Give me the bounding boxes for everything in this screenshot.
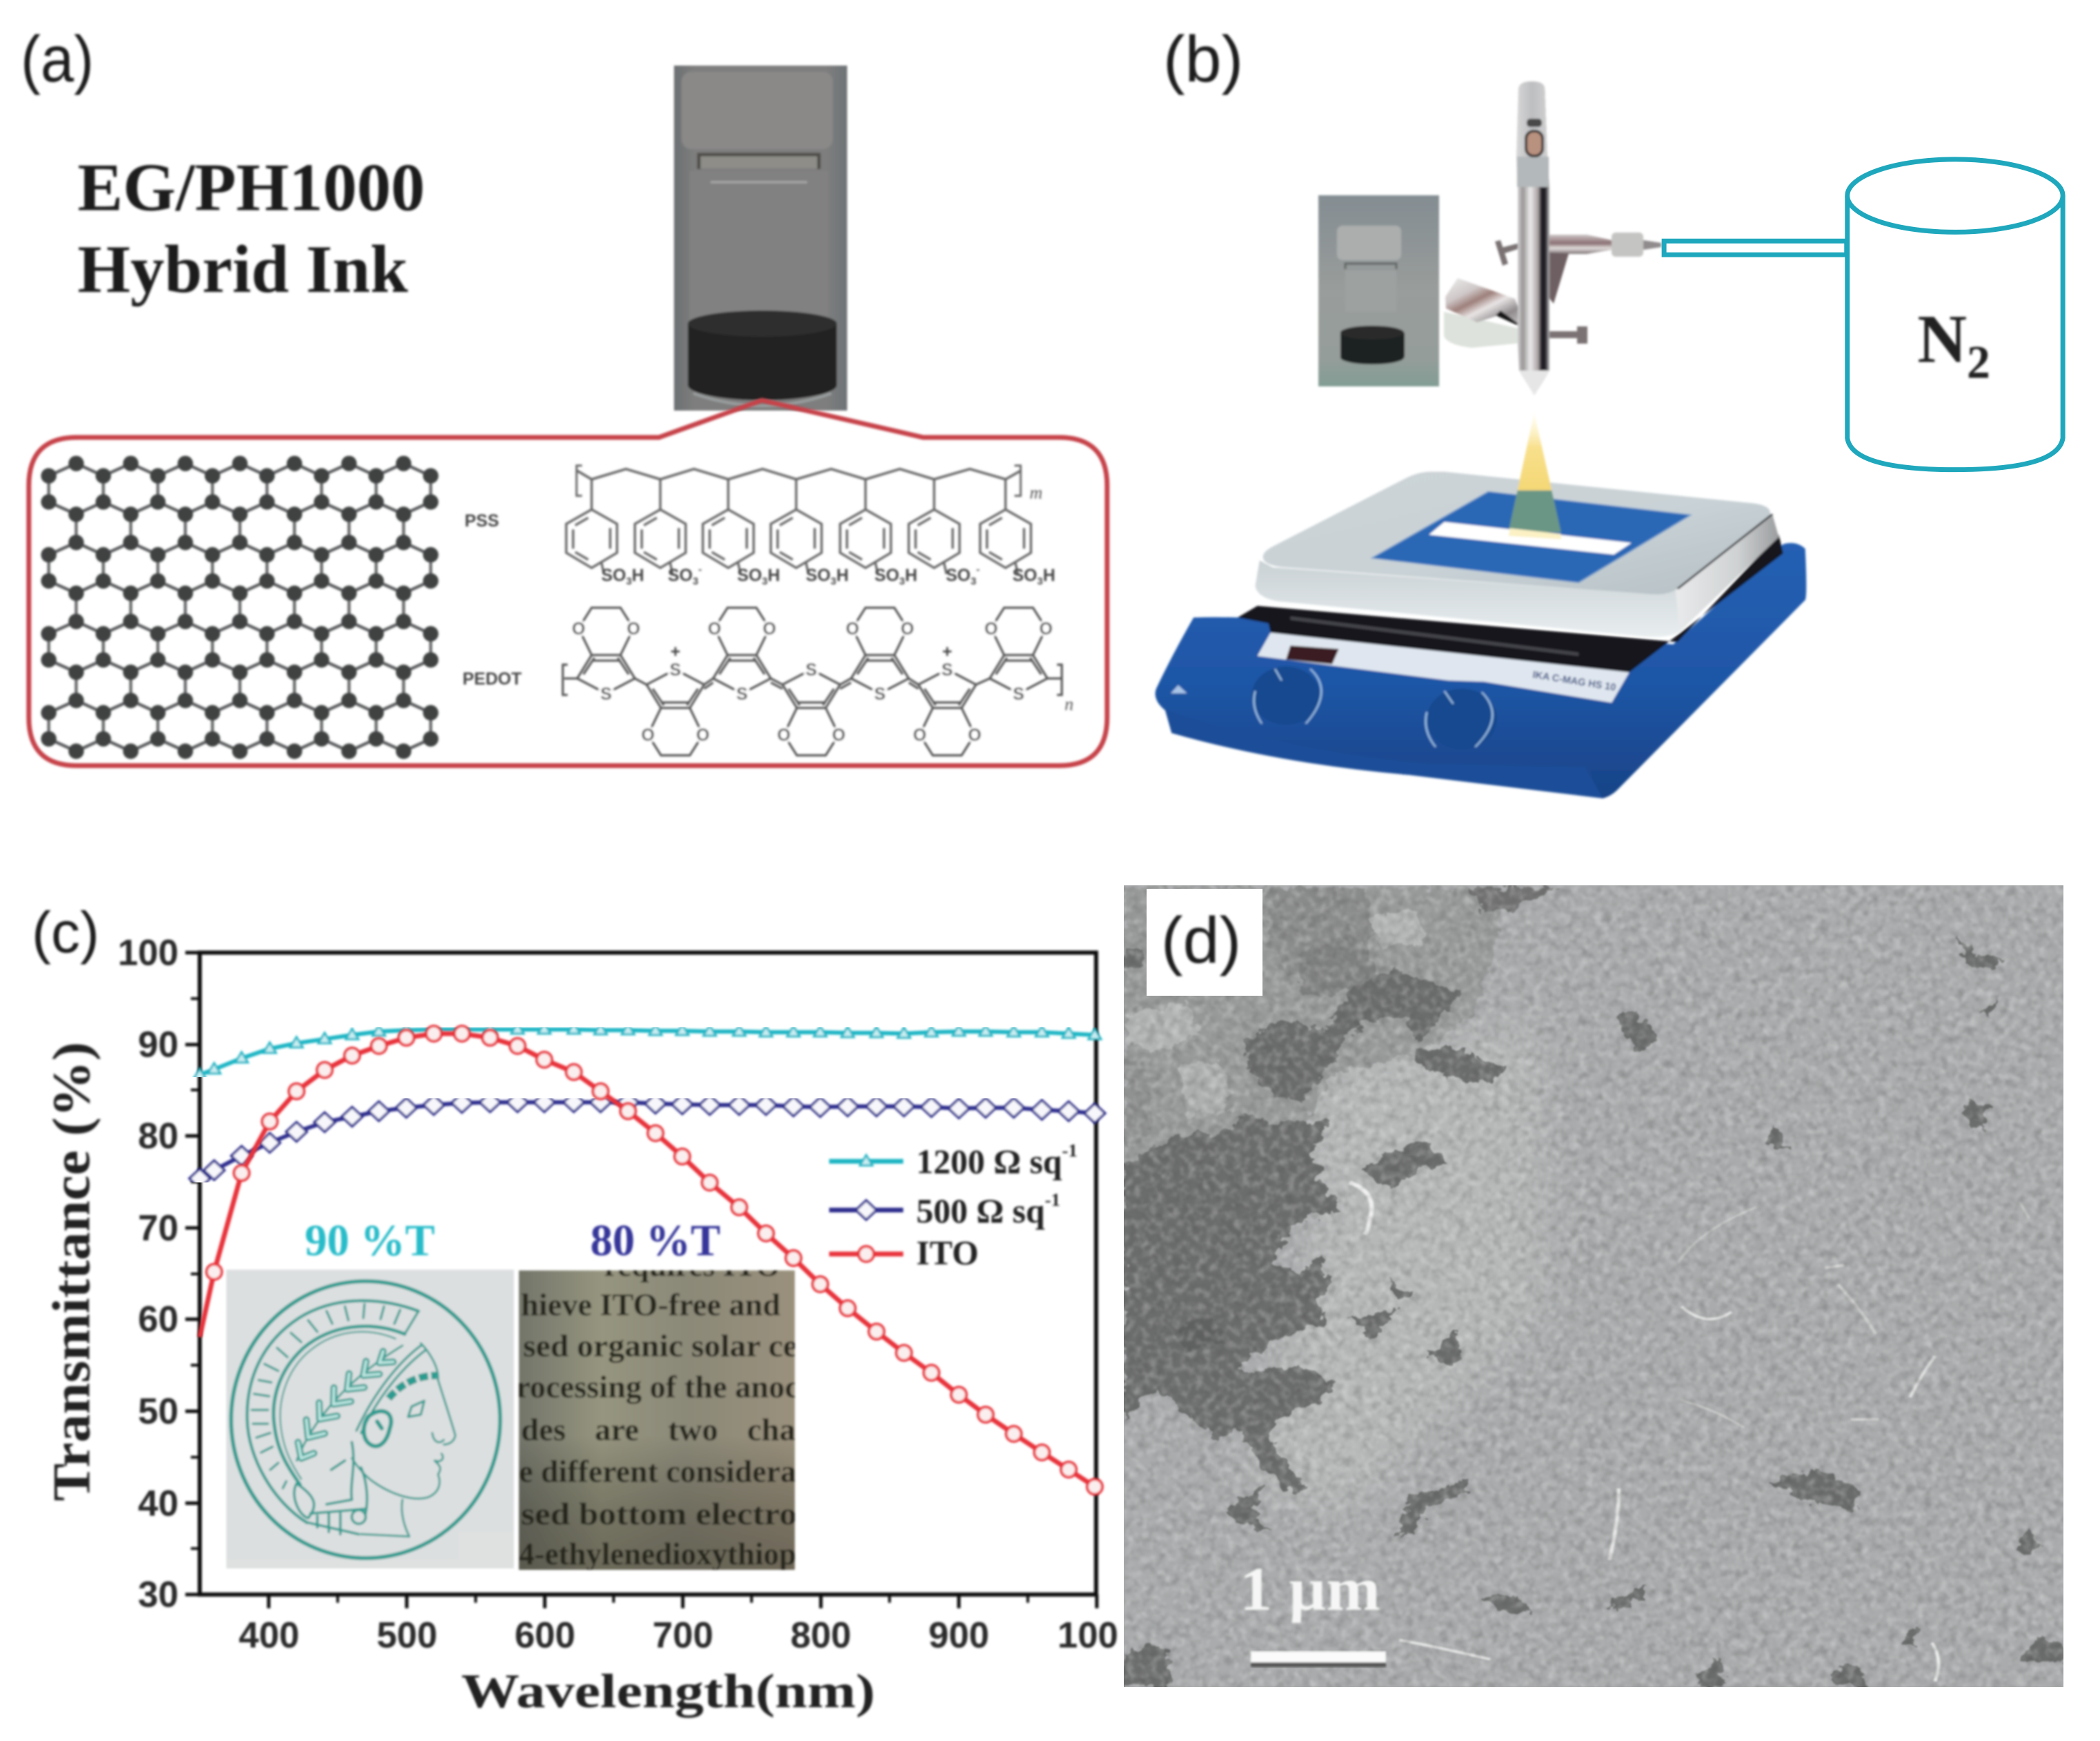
PSS chemical structure: H [1043,566,1056,585]
airbrush cup wedge [1496,311,1526,329]
PEDOT chemical structure: O [984,619,998,638]
PSS chemical structure: SO [668,564,706,587]
PEDOT chemical structure: O [572,619,585,638]
legend: 500 ohm: -1 [1045,1190,1060,1210]
inset label: 80 %T: 80 %T [591,1215,720,1265]
airbrush barrel [1516,81,1549,395]
digital display [1286,645,1339,665]
PSS chemical structure: SO [946,564,984,587]
spray cone above substrate [1518,413,1552,491]
hot plate [1156,413,1806,798]
PEDOT chemical structure: S [942,660,953,680]
PSS chemical structure [566,466,1056,587]
airbrush air valve and nut [1548,233,1661,257]
knob right [1426,689,1497,749]
legend: 1200 ohm: -1 [1062,1140,1078,1161]
heading: EG/PH1000 Hybrid Ink: Hybrid Ink [77,232,408,307]
PEDOT chemical structure: O [846,619,859,638]
brighter film near the exposed edge [1258,1035,1538,1504]
icon: airbrush [1444,81,1661,395]
panel label b: (b) [1163,23,1243,96]
heading: EG/PH1000 Hybrid Ink: EG/PH1000 [77,150,425,226]
inset photo: text through 80 %T film: requires ITO [604,1248,780,1283]
photo: small ink vial [1318,195,1439,386]
legend [829,1140,1078,1272]
x axis tick labels: 900 [929,1615,989,1655]
PEDOT chemical structure: S [670,660,681,680]
spray on substrate [1508,491,1561,533]
panel label c: (c) [32,900,99,965]
chart frame and axes [186,952,1097,1609]
y axis tick labels: 50 [138,1391,179,1432]
callout: red rounded box with pointer [29,400,1107,766]
N2 cylinder [1848,159,2063,470]
panel: d, SEM micrograph [1124,885,2063,1687]
spray on strip [1509,528,1561,540]
PEDOT chemical structure: S [736,685,748,704]
PSS chemical structure: SO [737,566,780,587]
series: 1200 ohm per square [200,1030,1095,1075]
PEDOT chemical structure: S [806,660,817,680]
x axis tick labels: 500 [377,1615,437,1655]
PEDOT chemical structure: S [600,685,612,704]
warning triangle [1171,685,1187,694]
PSS chemical structure: H [905,566,918,585]
inset label: 90 %T: 90 %T [305,1215,435,1265]
PEDOT chemical structure [563,608,1073,756]
PEDOT chemical structure: O [913,726,927,745]
graphene lattice [49,464,430,751]
y axis title: Transmittance (%) [41,1042,101,1501]
panel: c, transmittance chart [32,900,1118,1718]
PSS chemical structure: - [698,564,702,576]
PEDOT chemical structure: O [708,619,721,638]
PSS chemical structure: 3 [762,576,768,587]
dark exposed regions [1124,934,2063,1687]
airbrush lower cup base [1444,312,1525,348]
PSS chemical structure: SO [875,566,918,587]
PEDOT chemical structure: S [874,685,886,704]
x axis tick labels: 600 [515,1615,575,1655]
inset photo: text through 80 %T film: sed organic solar ce [523,1328,798,1363]
white strip [1429,522,1632,555]
PSS chemical structure: m [1029,482,1042,502]
PEDOT chemical structure: + [671,642,680,661]
legend: 500 ohm: 500 Ω sq [916,1192,1045,1230]
label: PSS: PSS [465,511,499,531]
white label box [1147,889,1262,996]
photo: ink vial [674,66,847,411]
PEDOT chemical structure: + [942,642,952,661]
SEM image [1124,885,2063,1687]
x axis tick labels: 400 [239,1615,299,1655]
PSS chemical structure: H [632,566,644,585]
airbrush trigger screws [1495,240,1587,344]
legend: 500 ohm [829,1190,1060,1230]
mottled upper left film [1124,887,2063,1687]
PSS chemical structure: H [768,566,780,585]
PEDOT chemical structure: O [968,726,981,745]
y axis tick labels: 70 [138,1208,179,1248]
PEDOT chemical structure: O [901,619,914,638]
inset photo: text through 80 %T film: des are two cha [521,1412,795,1447]
knob left [1251,667,1321,725]
y axis tick labels: 80 [138,1116,179,1157]
label: N2: 2 [1967,336,1990,388]
inset photo: text through 80 %T film: e different considera [519,1454,796,1489]
PEDOT chemical structure: O [832,726,845,745]
panel: b, spray coating setup [1156,23,2063,798]
y axis tick labels: 40 [138,1483,179,1524]
y axis tick labels: 90 [138,1025,179,1065]
hot plate top [1263,472,1770,594]
control strip [1258,633,1630,702]
PSS chemical structure: 3 [626,576,632,587]
inset photo: text through 80 %T film [516,1248,799,1571]
inset photo: text through 80 %T film: 4-ethylenedioxythiop [519,1536,796,1571]
Max Planck logo [231,1281,500,1558]
PEDOT chemical structure: O [696,726,709,745]
PEDOT chemical structure: S [1013,685,1024,704]
PEDOT chemical structure: n [1064,694,1073,714]
hot plate front lip [1165,709,1603,798]
bright fibres [1349,1182,2029,1682]
inset photo: text through 80 %T film: rocessing of the anoc [516,1369,799,1404]
PSS chemical structure: SO [806,566,849,587]
x axis tick labels: 100 [1058,1615,1118,1655]
PSS chemical structure: SO [1012,566,1056,587]
PEDOT chemical structure: O [627,619,640,638]
legend: ITO: ITO [916,1234,979,1272]
y axis tick labels: 60 [138,1299,179,1340]
x axis tick labels: 800 [791,1615,851,1655]
PSS chemical structure: 3 [831,576,836,587]
airbrush paint cup [1445,278,1526,329]
PSS chemical structure: 3 [693,576,698,587]
y axis tick labels [118,932,179,1615]
PSS chemical structure: 3 [899,576,905,587]
inset photo: text through 80 %T film: sed bottom electro [521,1496,797,1531]
panel: a, hybrid ink and chemical structures [21,23,1107,766]
PSS chemical structure: 3 [1037,576,1043,587]
legend: 1200 ohm [829,1140,1078,1181]
panel label d: (d) [1161,904,1241,977]
PSS chemical structure: - [976,564,980,576]
scale bar [1251,1651,1386,1667]
panel label a: (a) [21,23,94,96]
inset photo: text through 80 %T film: hieve ITO-free and [521,1287,780,1322]
hot plate blue base [1156,543,1806,798]
brand label: IKA C-MAG HS 10 [1532,669,1616,694]
label: PEDOT: PEDOT [463,669,522,689]
PEDOT chemical structure: O [777,726,791,745]
legend: 1200 ohm: 1200 Ω sq [916,1143,1062,1181]
x axis title: Wavelength(nm) [462,1665,875,1718]
PEDOT chemical structure: O [763,619,776,638]
laurel leaves [298,1351,393,1458]
PSS chemical structure: 3 [971,576,976,587]
scale text: 1 micrometre: 1 µm [1240,1555,1380,1624]
PSS chemical structure: H [836,566,849,585]
PSS chemical structure: SO [602,566,644,587]
gas line tube [1664,241,1847,255]
hot plate black under-plate [1238,535,1783,672]
PEDOT chemical structure: O [642,726,655,745]
blue substrate [1371,491,1691,582]
label: N2: N [1917,300,1967,377]
inset photo: logo through 90 %T film [226,1270,514,1568]
series: ITO [200,1034,1095,1487]
x axis tick labels [239,1615,1118,1655]
y axis tick labels: 30 [138,1575,179,1615]
PEDOT chemical structure: O [1040,619,1053,638]
y axis tick labels: 100 [118,932,179,973]
series: 500 ohm per square [200,1102,1095,1179]
x axis tick labels: 700 [653,1615,713,1655]
airbrush brace [1548,253,1569,304]
hot plate silver lip [1255,560,1680,637]
